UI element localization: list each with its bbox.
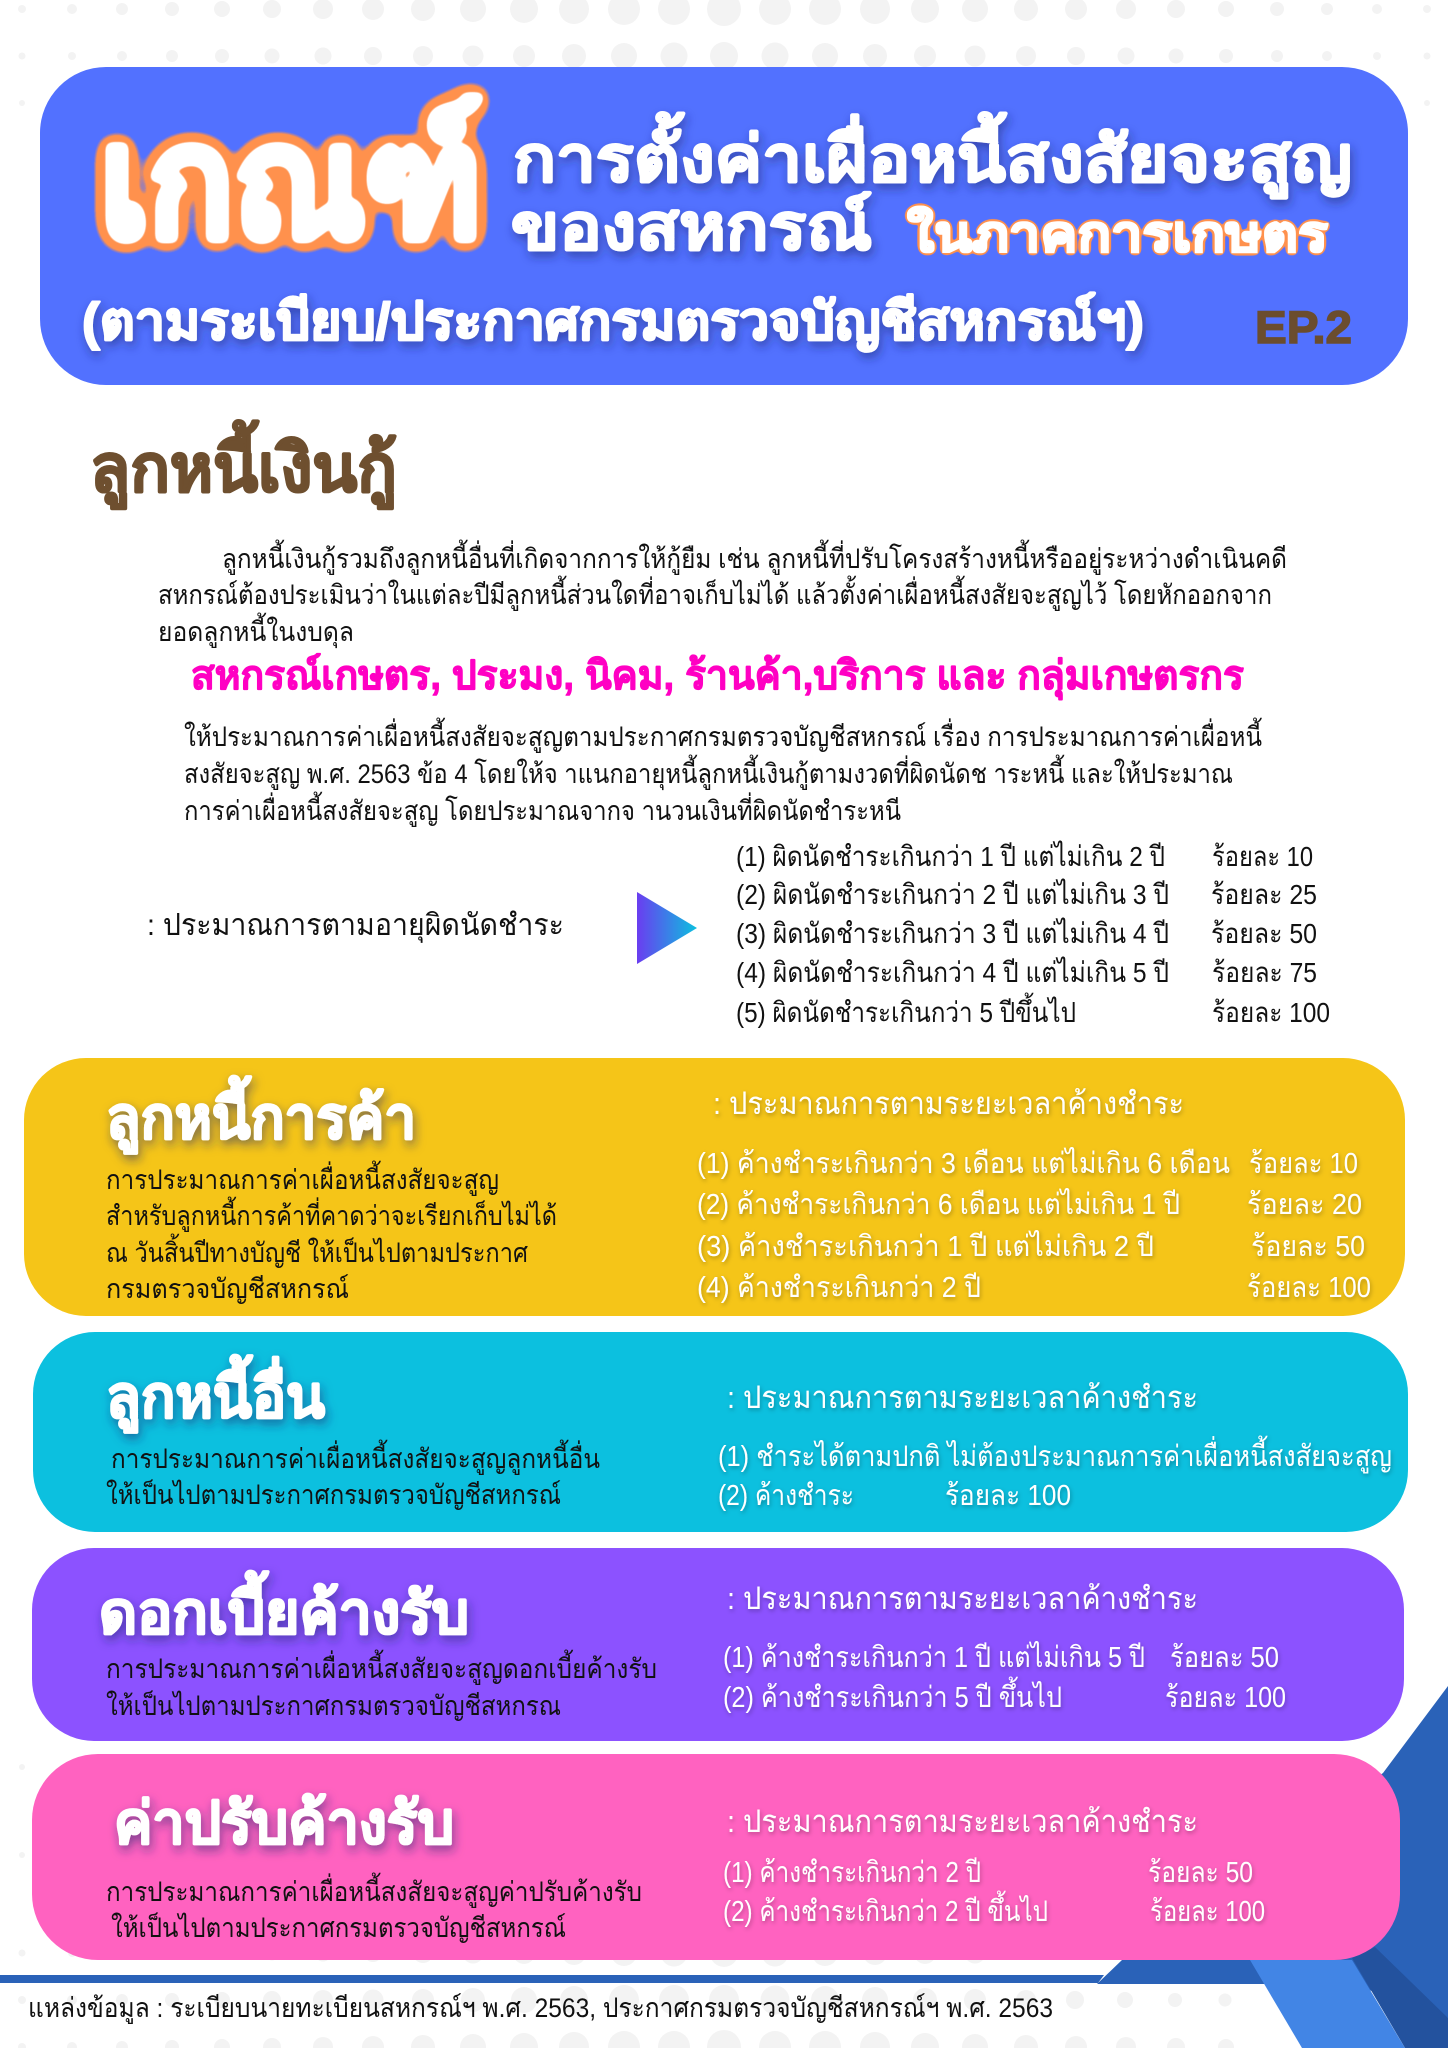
panel description: ให้เป็นไปตามประกาศกรมตรวจบัญชีสหกรณ์ (111, 1910, 566, 1943)
rate list: ร้อยละ 50 (1251, 1231, 1365, 1263)
overdue rate list: ร้อยละ 25 (1211, 879, 1317, 910)
rate list: (1) ค้างชำระเกินกว่า 2 ปี (723, 1857, 981, 1889)
rate list: ร้อยละ 100 (1150, 1896, 1265, 1928)
overdue rate list: ร้อยละ 10 (1212, 841, 1313, 872)
intro paragraph: ลูกหนี้เงินกู้รวมถึงลูกหนี้อื่นที่เกิดจากการให้กู้ยืม เช่น ลูกหนี้ที่ปรับโครงสร้างหนี้หรืออยู่ระหว่างดำเนินคดี (222, 539, 1287, 575)
title line 1: การตั้งค่าเผื่อหนี้สงสัยจะสูญ (513, 112, 1352, 199)
overdue rate list: ร้อยละ 100 (1212, 997, 1330, 1028)
provision paragraph: สงสัยจะสูญ พ.ศ. 2563 ข้อ 4 โดยให้จ าแนกอายุหนี้ลูกหนี้เงินกู้ตามงวดที่ผิดนัดช าระหนี้ และให้ประมาณ (184, 754, 1233, 791)
panel title: ลูกหนี้การค้า (106, 1076, 416, 1154)
rate list: (3) ค้างชำระเกินกว่า 1 ปี แต่ไม่เกิน 2 ปี (697, 1229, 1154, 1263)
panel description: กรมตรวจบัญชีสหกรณ์ (106, 1273, 349, 1304)
rate list: (1) ค้างชำระเกินกว่า 3 เดือน แต่ไม่เกิน 6 เดือน (697, 1146, 1230, 1180)
rate heading: : ประมาณการตามระยะเวลาค้างชำระ (713, 1086, 1184, 1121)
footer bar (0, 1975, 1104, 1983)
panel description (106, 1160, 557, 1304)
overdue rate list: (5) ผิดนัดชำระเกินกว่า 5 ปีขึ้นไป (736, 992, 1076, 1028)
rate list (723, 1640, 1286, 1714)
rate list: ร้อยละ 100 (945, 1480, 1071, 1512)
panel: other receivables (33, 1332, 1408, 1532)
overdue rate list: (3) ผิดนัดชำระเกินกว่า 3 ปี แต่ไม่เกิน 4 ปี (736, 918, 1169, 949)
rate heading: : ประมาณการตามระยะเวลาค้างชำระ (727, 1581, 1198, 1616)
intro paragraph: ยอดลูกหนี้ในงบดุล (158, 612, 354, 649)
rate list: (2) ค้างชำระเกินกว่า 2 ปี ขึ้นไป (723, 1890, 1048, 1928)
rate list (697, 1146, 1371, 1304)
rate list: ร้อยละ 100 (1247, 1272, 1371, 1304)
provision paragraph: การค่าเผื่อหนี้สงสัยจะสูญ โดยประมาณจากจ านวนเงินที่ผิดนัดชำระหนี (184, 791, 901, 827)
title word: เกณฑ์: เกณฑ์ (100, 95, 482, 271)
panel title: ลูกหนี้อื่น (106, 1355, 325, 1433)
panel: accrued interest receivable (32, 1548, 1404, 1741)
label: estimate by overdue age: : ประมาณการตามอายุผิดนัดชำระ (147, 909, 564, 944)
panel description: ให้เป็นไปตามประกาศกรมตรวจบัญชีสหกรณ์ (106, 1477, 561, 1510)
rate list: ร้อยละ 50 (1148, 1857, 1253, 1889)
panel description (106, 1649, 657, 1721)
overdue rate list: (1) ผิดนัดชำระเกินกว่า 1 ปี แต่ไม่เกิน 2 ปี (736, 841, 1165, 872)
overdue rate list: ร้อยละ 50 (1211, 918, 1317, 949)
overdue rate list: ร้อยละ 75 (1212, 957, 1317, 988)
rate list: ร้อยละ 10 (1249, 1148, 1358, 1180)
rate heading: : ประมาณการตามระยะเวลาค้างชำระ (727, 1804, 1198, 1839)
rate list (723, 1857, 1265, 1928)
panel description: ณ วันสิ้นปีทางบัญชี ให้เป็นไปตามประกาศ (106, 1233, 528, 1268)
intro paragraph: สหกรณ์ต้องประเมินว่าในแต่ละปีมีลูกหนี้ส่วนใดที่อาจเก็บไม่ได้ แล้วตั้งค่าเผื่อหนี้สงสัยจะสูญไว้ โดยหักออกจาก (158, 575, 1272, 611)
panel description (106, 1439, 600, 1510)
highlighted subtitle: ในภาคการเกษตร (907, 206, 1328, 262)
provision paragraph: ให้ประมาณการค่าเผื่อหนี้สงสัยจะสูญตามประกาศกรมตรวจบัญชีสหกรณ์ เรื่อง การประมาณการค่าเผื่อหนี้ (184, 717, 1262, 753)
panel: trade receivables (24, 1058, 1405, 1316)
panel title: ดอกเบี้ยค้างรับ (99, 1571, 469, 1646)
panel description: การประมาณการค่าเผื่อหนี้สงสัยจะสูญค่าปรับค้างรับ (106, 1872, 642, 1908)
icon: gradient arrow (637, 892, 697, 964)
rate list (718, 1435, 1392, 1512)
rate list: (2) ค้างชำระ (718, 1480, 854, 1512)
footer source line: แหล่งข้อมูล : ระเบียบนายทะเบียนสหกรณ์ฯ พ.ศ. 2563, ประกาศกรมตรวจบัญชีสหกรณ์ฯ พ.ศ. 2563 (28, 1992, 1053, 2024)
rate heading: : ประมาณการตามระยะเวลาค้างชำระ (727, 1380, 1198, 1415)
panel: accrued fines receivable (32, 1754, 1400, 1960)
panel description: การประมาณการค่าเผื่อหนี้สงสัยจะสูญดอกเบี้ยค้างรับ (106, 1649, 657, 1685)
overdue rate list (736, 841, 1330, 1028)
panel description (106, 1872, 642, 1943)
overdue rate list: (4) ผิดนัดชำระเกินกว่า 4 ปี แต่ไม่เกิน 5 ปี (736, 957, 1169, 988)
magenta cooperative types line: สหกรณ์เกษตร, ประมง, นิคม, ร้านค้า,บริการ และ กลุ่มเกษตรกร (191, 653, 1244, 701)
rate list: ร้อยละ 100 (1165, 1682, 1286, 1714)
corner decoration: blue geometric shapes (1097, 1686, 1448, 2048)
overdue rate list: (2) ผิดนัดชำระเกินกว่า 2 ปี แต่ไม่เกิน 3 ปี (736, 879, 1169, 910)
panel title: ค่าปรับค้างรับ (114, 1791, 454, 1856)
rate list: (2) ค้างชำระเกินกว่า 6 เดือน แต่ไม่เกิน 1 ปี (697, 1187, 1180, 1221)
panel description: ให้เป็นไปตามประกาศกรมตรวจบัญชีสหกรณ (106, 1688, 561, 1721)
heading: ลูกหนี้เงินกู้: ลูกหนี้เงินกู้ (90, 419, 397, 510)
rate list: (4) ค้างชำระเกินกว่า 2 ปี (697, 1272, 981, 1304)
panel description: สำหรับลูกหนี้การค้าที่คาดว่าจะเรียกเก็บไม่ได้ (106, 1196, 557, 1232)
rate list: ร้อยละ 50 (1170, 1642, 1279, 1674)
panel description: การประมาณการค่าเผื่อหนี้สงสัยจะสูญ (106, 1160, 499, 1196)
intro paragraph (158, 539, 1287, 649)
title line 2: ของสหกรณ์ (511, 191, 872, 263)
episode tag: EP.2 (1255, 302, 1352, 353)
rate list: ร้อยละ 20 (1247, 1189, 1362, 1221)
rate list: (1) ค้างชำระเกินกว่า 1 ปี แต่ไม่เกิน 5 ปี (723, 1640, 1145, 1674)
title line 3: (ตามระเบียบ/ประกาศกรมตรวจบัญชีสหกรณ์ฯ) (82, 292, 1144, 352)
panel: header banner (40, 67, 1408, 385)
panel description: การประมาณการค่าเผื่อหนี้สงสัยจะสูญลูกหนี้อื่น (111, 1439, 600, 1475)
provision paragraph (184, 717, 1262, 827)
rate list: (2) ค้างชำระเกินกว่า 5 ปี ขึ้นไป (723, 1676, 1062, 1714)
